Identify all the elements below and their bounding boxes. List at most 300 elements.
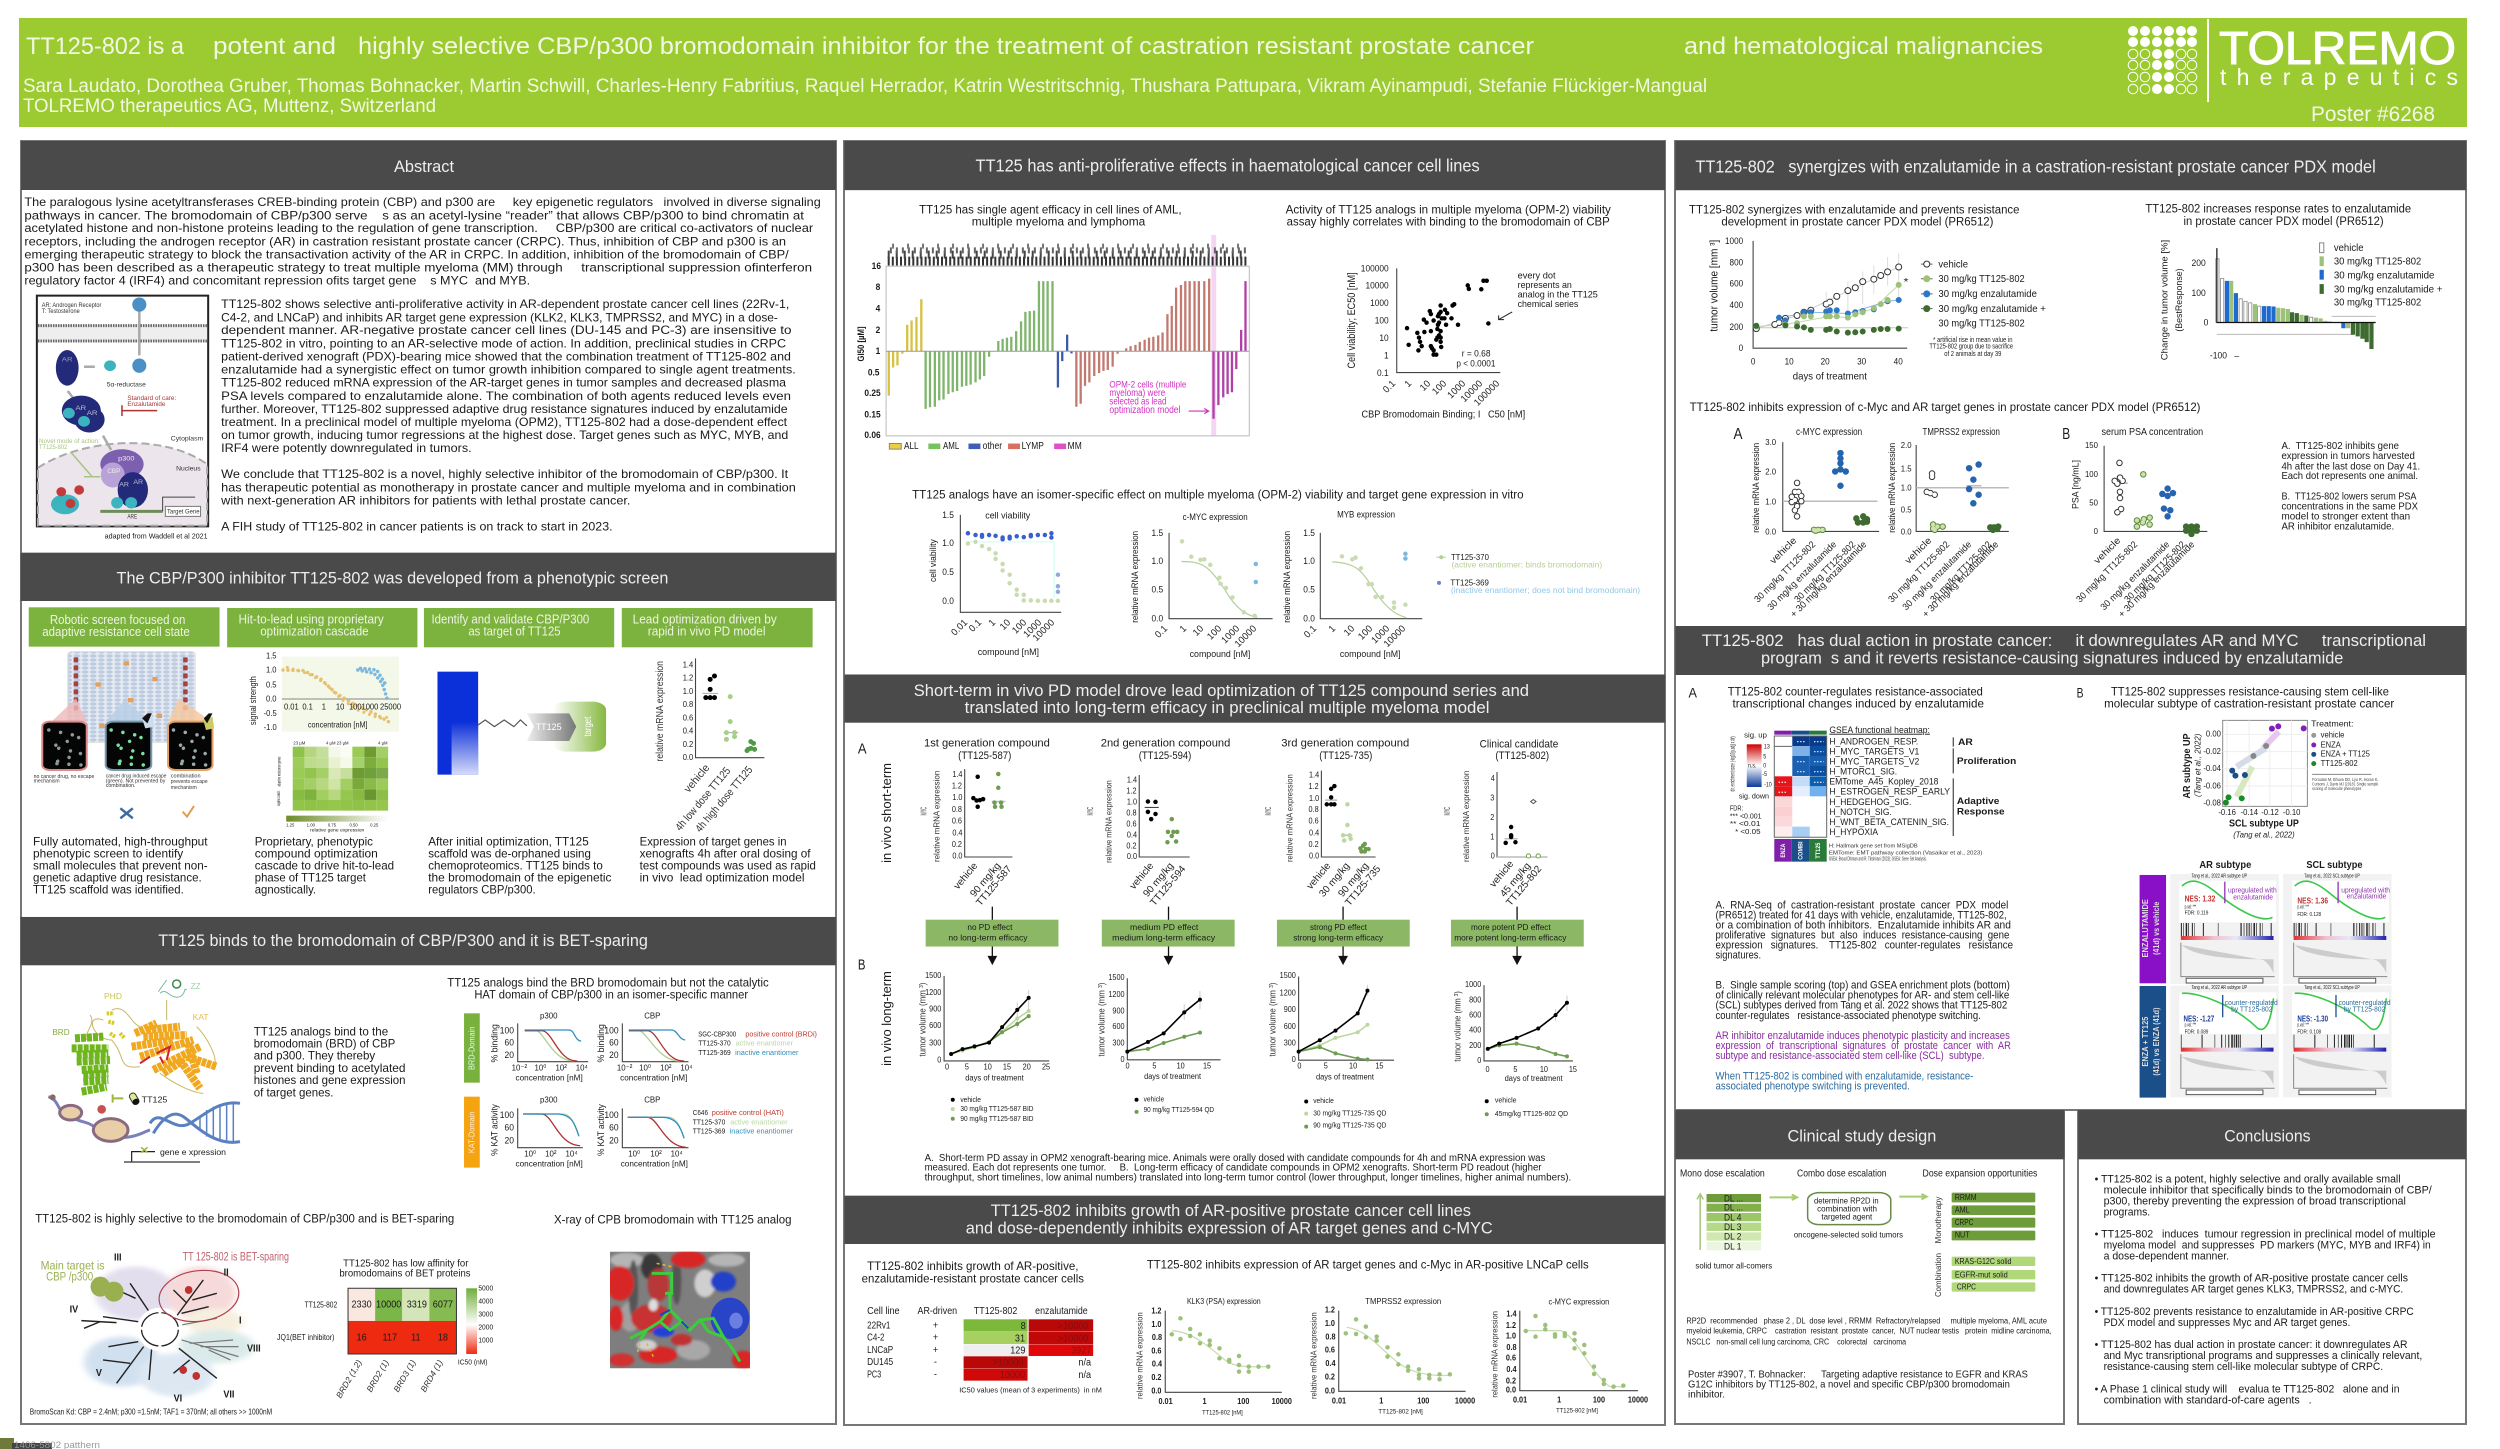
legend: waterfall groups: 30 mg/kg TT125-802: [2334, 257, 2421, 267]
charts: isomer viability, c-MYC and MYB: 100: [1205, 623, 1224, 642]
charts: BRD and KAT domain binding curves: % binding: [595, 1024, 606, 1062]
line chart: tumor volume in PDX model: 10: [1785, 356, 1794, 367]
scatter chart: viability versus CBP binding: every dot: [1518, 271, 1556, 281]
text block: abstract results: treatment. In a preclinical model of multiple myeloma (OPM2), TT125-802 had a dose-dependent effect: [221, 416, 788, 429]
charts: BRD and KAT domain binding curves: BRD-Domain: [468, 1026, 477, 1070]
scatter chart: AR versus SCL subtype: SCL subtype UP: [2229, 818, 2299, 829]
effect boxes and arrows: medium long-term efficacy: [1112, 934, 1215, 943]
heading: clinical study design: Clinical study design: [1788, 1126, 1936, 1145]
charts: BRD and KAT domain binding curves: 10⁰: [639, 1063, 651, 1073]
charts: isomer viability, c-MYC and MYB: 0.5: [1303, 584, 1315, 595]
text block: related poster: [1688, 1369, 2028, 1400]
text block: RNA-seq and subtype description: signatures.: [1716, 949, 1761, 961]
legend: treatment: TT125-802: [2321, 759, 2358, 768]
chart: signal strength dose response: -1.0: [264, 723, 277, 732]
charts: BRD and KAT domain binding curves: 10⁰: [628, 1149, 640, 1159]
scatter chart: viability versus CBP binding: 100: [1375, 315, 1389, 326]
dot plots: c-MYC, TMPRSS2, serum PSA: relative mRNA expression: [1751, 443, 1761, 533]
charts: KLK3, TMPRSS2 and c-MYC dose response: 1.2: [1151, 1306, 1161, 1315]
subheadings: efficacy and correlation: [919, 202, 1612, 228]
step headers: screen workflow: Robotic screen focused on: [50, 613, 185, 627]
panel: left column: TT 125-802 is BET-sparing: [183, 1250, 289, 1264]
authors: [23, 75, 1707, 117]
illustration: CBP protein structure and DNA: [48, 980, 240, 1162]
table: IC50 values per cell line: 22Rv1: [867, 1319, 890, 1331]
heatmap: GSEA functional: -5: [1762, 772, 1767, 778]
heatmap: GSEA functional: H_NOTCH_SIG.: [1829, 807, 1892, 817]
text block: screen workflow descriptions: genetic adaptive drug resistance.: [33, 871, 202, 885]
text block: screen workflow descriptions: scaffold was de-orphaned using: [428, 846, 591, 860]
line charts: tumor volume long-term: 25: [1042, 1062, 1050, 1072]
dot plots: c-MYC, TMPRSS2, serum PSA: 3.0: [1765, 438, 1776, 447]
charts: BRD and KAT domain binding curves: inactive enantiomer: [735, 1049, 799, 1057]
diagram: dose escalation and expansion: CRPC: [1955, 1218, 1973, 1227]
table: IC50 values per cell line: n/a: [1078, 1370, 1092, 1381]
diagram: bromodomain phylogenetic tree: [30, 1250, 289, 1417]
table: IC50 values per cell line: [867, 1305, 1102, 1395]
heatmap: GSEA functional: H_HEDGEHOG_SIG.: [1829, 797, 1911, 807]
compound generation titles: 1st generation compound: [924, 737, 1050, 749]
text block: RNA-seq and subtype description: expression signatures. TT125-802 counter-regulates resistance: [1716, 939, 2013, 951]
bar chart: GI50 by cell line: 0.25: [864, 388, 881, 398]
legend: PDX treatments: 30 mg/kg TT125-802: [1938, 274, 2025, 285]
heatmap: relative gene expression: 4 µM: [378, 740, 388, 746]
charts: BRD and KAT domain binding curves: 10⁻²: [617, 1063, 633, 1073]
heatmap: GSEA functional: H_MYC_TARGETS_V2: [1829, 756, 1920, 767]
heatmap: BET bromodomain affinity: BRD4 (1): [418, 1358, 445, 1394]
charts: isomer viability, c-MYC and MYB: relative mRNA expression: [1129, 531, 1140, 623]
subheading: BRD not HAT: TT125 analogs bind the BRD bromodomain but not the catalytic: [447, 976, 769, 990]
legends: dose groups: 90 mg/kg TT125-594 QD: [1144, 1106, 1214, 1114]
charts: KLK3, TMPRSS2 and c-MYC dose response: 1.0: [1151, 1320, 1161, 1329]
illustration: robotic screen plate and wells: [34, 652, 214, 818]
dot plots: MYC expression short-term: 3: [1490, 793, 1494, 803]
legends: dose groups: 90 mg/kg TT125-587 BID: [960, 1115, 1034, 1123]
line charts: tumor volume long-term: 0: [1297, 1061, 1302, 1071]
charts: BRD and KAT domain binding curves: C646: [693, 1109, 708, 1117]
effect boxes and arrows: no PD effect: [967, 923, 1013, 932]
dot plots: c-MYC, TMPRSS2, serum PSA: 0: [2094, 527, 2098, 536]
dot plots: c-MYC, TMPRSS2, serum PSA: PSA [ng/mL]: [2071, 460, 2081, 509]
line charts: tumor volume long-term: 900: [1112, 1006, 1125, 1016]
dot plots: MYC expression short-term: vehicle: [1128, 861, 1157, 892]
text block: PDX notes: B. TT125-802 lowers serum PSA: [2281, 490, 2417, 502]
dot plots: c-MYC, TMPRSS2, serum PSA: 30 mg/kg enzalutamide: [2099, 539, 2172, 613]
dot plots: MYC expression short-term: 45 mg/kg: [1498, 861, 1533, 899]
charts: KLK3, TMPRSS2 and c-MYC dose response: 100: [1237, 1397, 1249, 1406]
step headers: screen workflow: optimization cascade: [260, 624, 369, 638]
scatter chart: viability versus CBP binding: analog in the TT125: [1518, 290, 1598, 300]
dot plots: c-MYC, TMPRSS2, serum PSA: 30 mg/kg TT125-802: [1886, 539, 1952, 605]
dot plots: c-MYC, TMPRSS2, serum PSA: A: [1734, 425, 1743, 442]
line charts: tumor volume long-term: 10: [1349, 1061, 1358, 1071]
charts: isomer viability, c-MYC and MYB: 100: [1356, 623, 1375, 642]
text block: abstract results: with next-generation AR inhibitors for patients with lethal prostate cancer.: [220, 494, 630, 508]
diagram: bromodomain phylogenetic tree: IV: [70, 1304, 79, 1315]
GSEA enrichment plots: NES: 1.32: [2185, 895, 2215, 904]
waterfall chart: change in tumor volume: Change in tumor volume [%]: [2159, 240, 2170, 360]
effect boxes and arrows: more potent PD effect: [1471, 923, 1551, 932]
title: potent and: [213, 33, 336, 60]
panel: right column upper: Cursons J, Davis MJ (2018). Single sample: [2312, 782, 2379, 787]
GSEA enrichment plots: ENZALUTAMIDE: [2142, 898, 2150, 957]
table: IC50 values per cell line: AR-driven: [918, 1305, 957, 1316]
text block: abstract results: further. Moreover, TT125-802 suppressed adaptive drug resistance signatures induced by enzalutamide: [221, 403, 788, 416]
legend: PDX treatments: 30 mg/kg enzalutamide +: [1938, 304, 2046, 314]
bar chart: GI50 by cell line: 1: [876, 346, 880, 356]
text block: RNA-seq and subtype description: [1716, 899, 2013, 1092]
illustration: robotic screen plate and wells: prevents escape: [171, 779, 208, 784]
charts: BRD and KAT domain binding curves: % KAT activity: [595, 1104, 606, 1156]
text block: screen workflow descriptions: agnostically.: [255, 883, 316, 897]
text block: abbreviations: [1686, 1317, 2052, 1347]
subheading: BRD not HAT: HAT domain of CBP/p300 in an isomer-specific manner: [474, 988, 749, 1002]
dot plots: MYC expression short-term: 0.6: [1126, 819, 1137, 829]
diagram: bromodomain phylogenetic tree: VI: [174, 1393, 183, 1405]
dot plots: c-MYC, TMPRSS2, serum PSA: + 30 mg/kg enzalutamide: [1921, 539, 2001, 620]
line charts: tumor volume long-term: 0: [945, 1062, 950, 1072]
line charts: tumor volume long-term: 5: [1324, 1061, 1328, 1071]
dot plots: c-MYC, TMPRSS2, serum PSA: 1.0: [1901, 483, 1912, 493]
legends: dose groups: vehicle: [1495, 1096, 1517, 1105]
text block: RNA-seq and subtype description: subtype and resistance-associated stem cell-like (SCL) subtype.: [1716, 1049, 1984, 1061]
heatmap: GSEA functional: GSEA: Broad Dhiman and R. Tibshirani (2023); GSEA: Gene Set Analysis.: [1829, 857, 1927, 862]
charts: KLK3, TMPRSS2 and c-MYC dose response: TT125-802 [nM]: [1556, 1407, 1598, 1414]
table: IC50 values per cell line: +: [933, 1320, 939, 1331]
line chart: tumor volume in PDX model: 40: [1894, 356, 1903, 367]
legend: TT125 enantiomers: TT125-369: [1450, 578, 1489, 588]
heatmap: BET bromodomain affinity: TT125-802: [305, 1300, 337, 1310]
dot plots: MYC expression short-term: relative mRNA expression: [934, 770, 942, 862]
text block: RNA-seq and subtype description: of clinically relevant molecular phenotypes for AR- and stem cell-like: [1716, 989, 2009, 1001]
legend: PDX treatments: vehicle: [1938, 260, 1968, 270]
legend: waterfall groups: vehicle: [2334, 243, 2364, 254]
legend: PDX treatments: 30 mg/kg enzalutamide: [1938, 289, 2037, 300]
step headers: screen workflow: Identify and validate CBP/P300: [432, 612, 589, 626]
artifact: bottom left smudge: [0, 1438, 100, 1449]
legends: dose groups: vehicle: [960, 1096, 981, 1104]
charts: BRD and KAT domain binding curves: TT125-370: [698, 1040, 731, 1048]
charts: isomer viability, c-MYC and MYB: compound [nM]: [1340, 649, 1401, 660]
charts: BRD and KAT domain binding curves: 10⁴: [565, 1149, 578, 1159]
line chart: tumor volume in PDX model: 0: [1739, 343, 1743, 353]
charts: BRD and KAT domain binding curves: 100: [500, 1025, 514, 1035]
illustration: robotic screen plate and wells: no cancer drug, no escape: [34, 774, 95, 779]
text block: TT125 binding mechanism: histones and gene expression: [254, 1073, 405, 1087]
heatmap: relative gene expression: negative controls: [275, 791, 281, 806]
text block: abstract intro: The paralogous lysine acetyltransferases CREB-binding protein (CBP) and p300 are key epigenetic regulators involved in diverse signaling: [24, 196, 821, 209]
line charts: tumor volume long-term: days of treatment: [1144, 1073, 1201, 1081]
subheadings: selectivity and x-ray: X-ray of CPB bromodomain with TT125 analog: [554, 1213, 791, 1226]
effect boxes and arrows: medium PD effect: [1130, 923, 1199, 932]
line charts: tumor volume long-term: tumor volume (mm ³): [917, 982, 928, 1057]
bar chart: GI50 by cell line: 8: [876, 282, 880, 292]
charts: KLK3, TMPRSS2 and c-MYC dose response: 0.2: [1151, 1373, 1161, 1382]
heatmap: GSEA functional: [1730, 725, 2016, 862]
charts: BRD and KAT domain binding curves: active enantiomer: [736, 1040, 794, 1048]
row labels: A and B: B: [858, 957, 865, 973]
text block: abstract results: [220, 298, 796, 534]
charts: isomer viability, c-MYC and MYB: 10: [1191, 623, 1206, 639]
GSEA enrichment plots: SCL subtype: [2306, 859, 2362, 870]
authors: TOLREMO therapeutics AG, Muttenz, Switzerland: [23, 95, 436, 117]
dot plots: c-MYC, TMPRSS2, serum PSA: 30 mg/kg TT125-802: [1752, 539, 1818, 605]
text block: abstract intro: receptors, including the androgen receptor (AR) in castration resistant prostate cancer (CRPC). Thus, inhibition of CBP and p300 is an: [24, 235, 786, 248]
charts: KLK3, TMPRSS2 and c-MYC dose response: 100: [1417, 1396, 1429, 1405]
dot plots: MYC expression short-term: TT125-802: [1504, 864, 1545, 908]
dot plots: c-MYC, TMPRSS2, serum PSA: B: [2062, 425, 2070, 442]
dot plots: MYC expression short-term: TT125-587: [974, 864, 1015, 908]
table: IC50 values per cell line: >10000: [1058, 1321, 1088, 1332]
heatmap: BET bromodomain affinity: BRD2 (1,2): [334, 1358, 364, 1400]
diagram: dose escalation and expansion: EGFR-mut solid: [1955, 1271, 2008, 1280]
panel: right column upper: [1675, 141, 2466, 1110]
charts: isomer viability, c-MYC and MYB: [844, 509, 1665, 1416]
diagram: bromodomain phylogenetic tree: VIII: [247, 1343, 261, 1355]
charts: BRD and KAT domain binding curves: 10⁴: [576, 1063, 588, 1073]
text block: abstract intro: p300 has been described as a therapeutic strategy to treat multiple myeloma (MM) through transcriptional suppression ofinterferon: [24, 261, 812, 275]
dot plots: MYC expression short-term: vehicle: [952, 861, 981, 892]
dot plots: MYC expression short-term: 1.0: [1127, 797, 1138, 807]
chart: relative mRNA expression lead optimization: 0.8: [683, 700, 694, 709]
title: highly selective CBP/p300 bromodomain inhibitor for the treatment of castration resistant prostate cancer: [358, 33, 1534, 60]
scatter chart: AR versus SCL subtype: -0.06: [2203, 781, 2221, 790]
charts: BRD and KAT domain binding curves: KAT-Domain: [468, 1111, 477, 1153]
subheadings: growth and expression: TT125-802 inhibits growth of AR-positive,: [867, 1259, 1079, 1273]
chart: relative mRNA expression lead optimization: 1.2: [683, 673, 694, 683]
GSEA enrichment plots: NES: 1.36: [2297, 897, 2328, 906]
dot plots: c-MYC, TMPRSS2, serum PSA: + 30 mg/kg enzalutamide: [1789, 539, 1869, 620]
effect boxes and arrows: more potent long-term efficacy: [1454, 934, 1567, 943]
text block: RNA-seq and subtype description: associated phenotype switching is prevented.: [1716, 1079, 1910, 1092]
legend: waterfall groups: 30 mg/kg enzalutamide +: [2334, 284, 2443, 295]
line charts: tumor volume long-term: 10: [1177, 1061, 1185, 1071]
text block: TT125 binding mechanism: [254, 1025, 405, 1099]
heatmap: GSEA functional: * <0.05: [1735, 828, 1761, 836]
heatmap: GSEA functional: H_ANDROGEN_RESP.: [1829, 736, 1918, 747]
step headers: screen workflow: Hit-to-lead using proprietary: [239, 612, 384, 626]
text block: screen workflow descriptions: Proprietary, phenotypic: [255, 834, 373, 848]
line charts: tumor volume long-term: 15: [1003, 1062, 1011, 1072]
legend: waterfall groups: 30 mg/kg TT125-802: [2334, 298, 2421, 308]
figure: AR signaling pathway: Nucleus: [176, 465, 201, 472]
text block: screen workflow descriptions: Fully automated, high-throughput: [33, 834, 208, 848]
heatmap: relative gene expression: 1.00: [307, 822, 315, 828]
text block: RNA-seq and subtype description: B. Single sample scoring (top) and GSEA enrichment plots (bottom): [1716, 979, 2010, 991]
dot plots: MYC expression short-term: 0.6: [1309, 816, 1319, 826]
text block: abstract intro: regulatory factor 4 (IRF4) and concomitant repression ofits target gene s MYC and MYB.: [24, 274, 530, 288]
charts: BRD and KAT domain binding curves: 10²: [650, 1149, 662, 1159]
legend: PDX treatments: [1921, 260, 2046, 329]
heatmap: relative gene expression: 1.25: [286, 822, 295, 828]
legend: treatment: vehicle: [2321, 731, 2344, 740]
charts: BRD and KAT domain binding curves: 20: [504, 1135, 514, 1145]
text block: abstract results: patient-derived xenograft (PDX)-bearing mice showed that the combination treatment of TT125-802 and: [221, 351, 791, 364]
line charts: tumor volume long-term: 5: [1152, 1061, 1156, 1071]
logo: Tolremo: therapeutics: [2220, 64, 2458, 90]
diagram: dose escalation and expansion: DL 2: [1724, 1231, 1742, 1242]
illustration: CBP protein structure and DNA: gene e xpression: [160, 1148, 226, 1157]
dot plots: c-MYC, TMPRSS2, serum PSA: serum PSA concentration: [2101, 426, 2203, 438]
text block: TT125 binding mechanism: TT125 analogs bind to the: [254, 1025, 388, 1039]
dot plots: c-MYC, TMPRSS2, serum PSA: 30 mg/kg enzalutamide: [1901, 539, 1974, 613]
text block: PDX notes: Each dot represents one animal.: [2281, 470, 2418, 482]
diagram: bromodomain phylogenetic tree: III: [114, 1252, 122, 1264]
scatter chart: viability versus CBP binding: 100000: [1472, 378, 1502, 409]
heatmap: GSEA functional: H_MYC_TARGETS_V1: [1829, 746, 1920, 757]
text block: RNA-seq and subtype description: When TT125-802 is combined with enzalutamide, resistance-: [1716, 1069, 1974, 1082]
legends: dose groups: 30 mg/kg TT125-735 QD: [1313, 1109, 1387, 1118]
dot plots: c-MYC, TMPRSS2, serum PSA: 1.5: [1901, 464, 1912, 474]
logo: Tolremo: [2128, 19, 2458, 102]
scatter chart: viability versus CBP binding: 1000: [1370, 297, 1389, 308]
scatter chart: AR versus SCL subtype: -0.16: [2218, 808, 2236, 817]
charts: isomer viability, c-MYC and MYB: 1000: [1021, 617, 1044, 640]
diagram: dose escalation and expansion: KRAS-G12C solid: [1955, 1257, 2011, 1266]
compound generation titles: (TT125-587): [958, 749, 1011, 761]
line chart: tumor volume in PDX model: 30: [1857, 356, 1866, 367]
dot plots: c-MYC, TMPRSS2, serum PSA: vehicle: [2092, 535, 2123, 566]
figure: AR signaling pathway: [37, 296, 208, 541]
scatter chart: AR versus SCL subtype: 0.00: [2206, 729, 2221, 739]
compound generation titles: (TT125-735): [1319, 749, 1372, 761]
diagram: dose escalation and expansion: combination with: [1817, 1205, 1877, 1214]
diagram: dose escalation and expansion: determine RP2D in: [1814, 1197, 1879, 1206]
GSEA enrichment plots: Tang et al., 2022 SCL subtype UP: [2304, 874, 2360, 879]
figure: AR signaling pathway: AR: [119, 481, 129, 488]
charts: isomer viability, c-MYC and MYB: 1.0: [1303, 556, 1315, 566]
charts: BRD and KAT domain binding curves: 10⁴: [680, 1063, 693, 1073]
chart: signal strength dose response: [247, 651, 402, 732]
line charts: tumor volume long-term: 15: [1375, 1061, 1383, 1071]
GSEA enrichment plots: Tang et al., 2022 SCL subtype UP: [2304, 985, 2360, 990]
subheadings: growth and expression: enzalutamide-resistant prostate cancer cells: [862, 1272, 1084, 1286]
dot plots: MYC expression short-term: MYC: [1087, 807, 1096, 816]
charts: isomer viability, c-MYC and MYB: relative mRNA expression: [1281, 531, 1292, 623]
figure: AR signaling pathway: Standard of care:: [127, 395, 176, 402]
text block: abstract results: C4-2, and LNCaP) and inhibits AR target gene expression (KLK2, KLK3, TMPRSS2, and MYC) in a dose-: [221, 311, 778, 325]
GSEA enrichment plots: Tang et al., 2022 AR subtype UP: [2191, 874, 2247, 879]
text block: abstract intro: acetylated histone and non-histone proteins leading to the regulation of gene transcription. CBP/p300 are critical co-activators of nuclear: [24, 222, 813, 235]
legend: treatment: ENZA: [2321, 741, 2341, 750]
GSEA enrichment plots: enzalutamide: [2233, 893, 2273, 902]
chart: signal strength dose response: 10: [336, 702, 345, 711]
illustration: robotic screen plate and wells: combination.: [106, 783, 136, 788]
charts: KLK3, TMPRSS2 and c-MYC dose response: TT125-802 [nM]: [1378, 1407, 1423, 1415]
charts: KLK3, TMPRSS2 and c-MYC dose response: relative mRNA expression: [1308, 1312, 1319, 1399]
bar chart: GI50 by cell line: 2: [876, 324, 880, 335]
waterfall chart: change in tumor volume: 0: [2204, 317, 2208, 328]
dot plots: MYC expression short-term: 0.4: [1127, 830, 1138, 840]
charts: KLK3, TMPRSS2 and c-MYC dose response: relative mRNA expression: [1134, 1312, 1145, 1399]
scatter chart: viability versus CBP binding: represents an: [1518, 280, 1572, 291]
dot plots: c-MYC, TMPRSS2, serum PSA: 30 mg/kg TT125-802: [1792, 539, 1858, 605]
heatmap: GSEA functional: GSEA functional heatmap:: [1829, 725, 1930, 735]
dot plots: MYC expression short-term: 0.0: [952, 851, 963, 861]
charts: KLK3, TMPRSS2 and c-MYC dose response: 0.4: [1325, 1359, 1336, 1368]
dot plots: MYC expression short-term: 0.2: [952, 840, 962, 849]
charts: KLK3, TMPRSS2 and c-MYC dose response: relative mRNA expression: [1489, 1311, 1500, 1398]
dot plots: MYC expression short-term: 0.4: [1309, 828, 1320, 838]
table: IC50 values per cell line: TT125-802: [974, 1305, 1017, 1316]
charts: KLK3, TMPRSS2 and c-MYC dose response: 1: [1379, 1396, 1384, 1405]
figure: AR signaling pathway: p300: [118, 455, 135, 462]
line chart: tumor volume in PDX model: 600: [1730, 278, 1743, 289]
line charts: tumor volume long-term: 300: [929, 1038, 942, 1048]
dot plots: MYC expression short-term: 4: [1491, 773, 1495, 783]
illustration: CBP protein structure and DNA: BRD: [52, 1028, 70, 1037]
dot plots: c-MYC, TMPRSS2, serum PSA: relative mRNA expression: [1887, 443, 1897, 533]
GSEA enrichment plots: NES: -1.30: [2297, 1015, 2328, 1024]
line charts: tumor volume long-term: 300: [1284, 1038, 1296, 1048]
dot plots: MYC expression short-term: 0.8: [1309, 805, 1319, 814]
dot plots: MYC expression short-term: 1.2: [1309, 781, 1319, 791]
charts: BRD and KAT domain binding curves: 20: [504, 1050, 514, 1060]
scatter chart: AR versus SCL subtype: [2180, 720, 2379, 840]
scatter chart: viability versus CBP binding: CBP Bromodomain Binding; I C50 [nM]: [1362, 410, 1525, 420]
heading: short-term in vivo PD: translated into long-term efficacy in preclinical multiple myeloma model: [965, 698, 1489, 717]
figure: AR signaling pathway: TT125-802: [39, 444, 68, 451]
legend: cancer types: [889, 440, 1082, 452]
chart: relative mRNA expression lead optimization: vehicle: [682, 762, 712, 795]
legend: TT125 enantiomers: (active enantiomer; binds bromodomain): [1451, 560, 1602, 570]
charts: isomer viability, c-MYC and MYB: 0.5: [942, 567, 954, 577]
dot plots: MYC expression short-term: 0.6: [952, 816, 962, 826]
charts: BRD and KAT domain binding curves: CBP: [644, 1095, 661, 1105]
scatter chart: AR versus SCL subtype: -0.08: [2203, 798, 2221, 807]
line charts: tumor volume long-term: days of treatment: [1505, 1075, 1563, 1083]
heading: binds to bromodomain: TT125 binds to the bromodomain of CBP/P300 and it is BET-sparing: [158, 931, 648, 950]
line chart: tumor volume in PDX model: of 2 animals at day 39: [1944, 350, 2002, 358]
heatmap: relative gene expression: 0.25: [370, 822, 379, 828]
dot plots: c-MYC, TMPRSS2, serum PSA: vehicle: [1903, 535, 1934, 566]
subheadings: A and B: B: [2077, 685, 2083, 700]
dot plots: MYC expression short-term: 0.8: [1126, 808, 1137, 818]
scatter chart: AR versus SCL subtype: (Tang et al., 2022): [2233, 831, 2295, 840]
legend: TT125 enantiomers: (inactive enantiomer; does not bind bromodomain): [1451, 586, 1640, 596]
subheadings: efficacy and correlation: Activity of TT125 analogs in multiple myeloma (OPM-2) viability: [1286, 202, 1612, 216]
line charts: tumor volume long-term: 5: [1513, 1064, 1517, 1074]
subheadings: selectivity and x-ray: TT125-802 is highly selective to the bromodomain of CBP/p300 and is BET-sparing: [35, 1212, 454, 1226]
diagram: bromodomain phylogenetic tree: VII: [223, 1389, 235, 1400]
heatmap: GSEA functional: EMTome: EMT pathway collection (Vasaikar et al., 2023): [1829, 851, 1982, 856]
diagram: dose escalation and expansion: DL ...: [1724, 1202, 1743, 1213]
dot plots: c-MYC, TMPRSS2, serum PSA: 30 mg/kg TT125-802: [1928, 539, 1994, 605]
figure: AR signaling pathway: 5α-reductase: [107, 381, 146, 388]
title: TT125-802 is a: [26, 33, 185, 60]
table: IC50 values per cell line: IC50 values (mean of 3 experiments) in nM: [959, 1387, 1102, 1395]
text block: abstract results: TT125-802 in vitro, pointing to an AR-selective mode of action. In addition, preclinical studies in CRPC: [221, 337, 786, 351]
charts: KLK3, TMPRSS2 and c-MYC dose response: 1.2: [1325, 1305, 1335, 1315]
text block: screen workflow descriptions: compound optimization: [255, 846, 378, 860]
legends: dose groups: 90 mg/kg TT125-735 QD: [1313, 1122, 1387, 1130]
bar chart: GI50 by cell line: [855, 235, 1249, 452]
diagram: bromodomain phylogenetic tree: V: [96, 1368, 103, 1379]
charts: BRD and KAT domain binding curves: 60: [504, 1037, 514, 1048]
line charts: tumor volume long-term: 1200: [1108, 990, 1125, 999]
figure: AR signaling pathway: Cytoplasm: [171, 435, 203, 442]
GSEA enrichment plots: by TT125-802: [2344, 1006, 2385, 1014]
text block: abstract intro: [24, 196, 821, 288]
text block: TT125 binding mechanism: prevent binding to acetylated: [254, 1061, 405, 1075]
scatter chart: AR versus SCL subtype: (Tang et al., 2022): [2194, 734, 2203, 797]
text block: RNA-seq and subtype description: AR inhibitor enzalutamide induces phenotypic plasticity and increases: [1716, 1029, 2010, 1041]
heatmap: relative gene expression: 0.75: [328, 822, 337, 828]
dot plots: MYC expression short-term: relative mRNA expression: [1287, 774, 1295, 862]
line charts: tumor volume long-term: 15: [1569, 1064, 1577, 1074]
dot plots: MYC expression short-term: vehicle: [1488, 859, 1517, 890]
charts: isomer viability, c-MYC and MYB: 1.5: [942, 509, 954, 520]
